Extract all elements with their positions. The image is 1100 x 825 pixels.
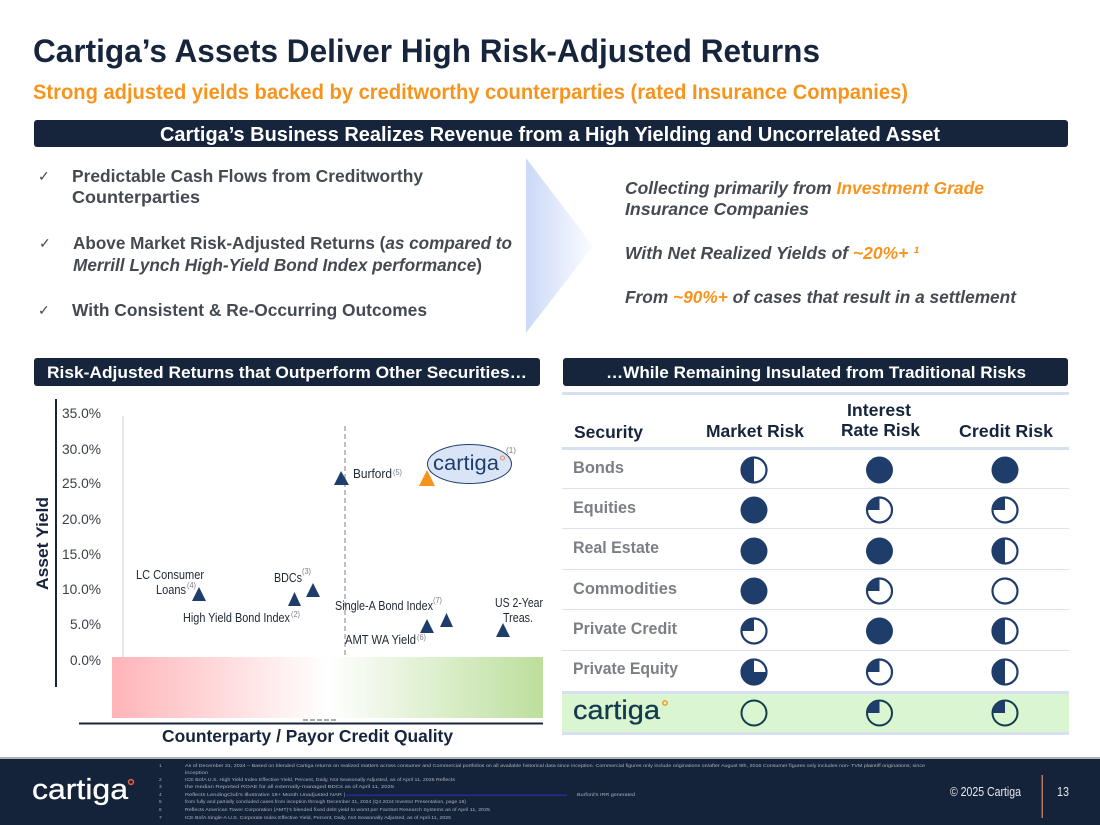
title: Cartiga’s Assets Deliver High Risk-Adjusted Returns: [33, 33, 820, 69]
data point: High Yield Bond Index: (2): [291, 610, 300, 619]
bullet: above market returns: Merrill Lynch High-Yield Bond Index performance): [73, 255, 482, 275]
data point: Burford: [334, 466, 402, 485]
panel: collection callouts: Collecting primarily from Investment Grade: [625, 178, 984, 198]
credit quality gradient: [112, 657, 543, 718]
footnotes: the median Reported ROAE for all externally-managed BDCs as of April 11, 2025: [185, 784, 394, 790]
bullet: above market returns: [39, 233, 512, 275]
data point: AMT WA Yield: [345, 619, 434, 647]
bullet: predictable cash flows: ✓: [38, 168, 50, 184]
panel: bullet list: [38, 166, 512, 320]
bullet: above market returns: ✓: [39, 235, 51, 251]
y axis ticks: 10.0%: [62, 581, 101, 597]
data point: AMT WA Yield: (6): [417, 633, 426, 642]
row: Commodities: Commodities: [573, 580, 677, 598]
x axis title: Counterparty / Payor Credit Quality: [162, 726, 453, 746]
table: risk matrix: [562, 392, 1069, 735]
footnotes: 4: [159, 792, 162, 798]
data point: US 2-Year Treas.: Treas.: [503, 610, 533, 625]
data point: LC Consumer Loans: (4): [187, 581, 196, 590]
data point: BDCs: (3): [302, 567, 311, 576]
arrow: [526, 158, 593, 333]
data point: Cartiga: [419, 444, 516, 486]
footnotes: inception: [185, 770, 208, 776]
data point: Burford: (5): [393, 468, 402, 477]
panel: collection callouts: Insurance Companies: [625, 199, 809, 219]
data point: High Yield Bond Index: High Yield Bond Index: [183, 610, 290, 625]
panel: collection callouts: With Net Realized Yields of ~20%+ ¹: [625, 243, 919, 263]
footnotes: 1: [159, 763, 162, 769]
row: Private Equity: Private Equity: [573, 660, 679, 678]
data point: US 2-Year Treas.: US 2-Year: [495, 595, 544, 610]
footer logo: cartiga: [32, 774, 129, 806]
row: Private Credit: Private Credit: [573, 620, 677, 638]
data point: Cartiga: (1): [506, 446, 516, 455]
y axis ticks: 25.0%: [62, 475, 101, 491]
row: Private Equity: [573, 660, 1018, 684]
header bar: revenue: Cartiga’s Business Realizes Revenue from a High Yielding and Uncorrelated Asset: [160, 124, 940, 146]
row: Cartiga: [573, 695, 1018, 726]
bullet: consistent outcomes: With Consistent & Re-Occurring Outcomes: [72, 300, 427, 320]
panel: collection callouts: [625, 178, 1017, 307]
data point: Single-A Bond Index: (7): [433, 596, 442, 605]
panel: collection callouts: From ~90%+ of cases that result in a settlement: [625, 287, 1017, 307]
table headers: Market Risk: [706, 421, 804, 441]
footnotes: 2: [159, 777, 162, 783]
y axis ticks: 35.0%: [62, 405, 101, 421]
data point: LC Consumer Loans: Loans: [156, 582, 186, 597]
footnotes: 7: [159, 815, 162, 821]
footnotes: As of December 31, 2024 – Based on blended Cartiga returns on realized matters across consumer and Commercial portfolios on all available historical data since inception. Commercial figures only include originations on/after August 8th, 2016 Consumer figures only includes non- TVM plaintiff originations; since: [185, 763, 925, 769]
row: Private Credit: [573, 618, 1018, 644]
bullet: predictable cash flows: [38, 166, 423, 207]
header bar: insulated from risks: …While Remaining Insulated from Traditional Risks: [606, 363, 1026, 382]
table headers: Security: [574, 422, 643, 442]
subtitle: Strong adjusted yields backed by creditworthy counterparties (rated Insurance Companies): [33, 81, 908, 104]
footnotes: [159, 763, 925, 821]
bullet: consistent outcomes: ✓: [38, 302, 50, 318]
data point: BDCs: BDCs: [274, 570, 302, 585]
data point: High Yield Bond Index: [183, 592, 301, 625]
data point: US 2-Year Treas.: [495, 595, 544, 637]
table headers: Credit Risk: [959, 421, 1053, 441]
row: Bonds: Bonds: [573, 459, 624, 477]
header bar: insulated from risks: [563, 358, 1068, 386]
page number: 13: [1057, 784, 1069, 799]
table headers: [574, 400, 1053, 442]
table headers: Interest: [847, 400, 911, 420]
data point: Cartiga: cartiga: [433, 452, 499, 475]
header bar: revenue: [34, 120, 1068, 147]
y axis ticks: 15.0%: [62, 546, 101, 562]
row: Equities: Equities: [573, 499, 636, 517]
copyright: © 2025 Cartiga: [950, 784, 1022, 799]
row: Bonds: [573, 456, 1018, 484]
data point: LC Consumer Loans: LC Consumer: [136, 567, 205, 582]
y axis title: Asset Yield: [33, 497, 52, 590]
footnotes: 5: [159, 799, 162, 805]
y axis ticks: 30.0%: [62, 441, 101, 457]
row: Real Estate: [573, 538, 1018, 564]
y axis ticks: 5.0%: [70, 616, 101, 632]
data point: Single-A Bond Index: [335, 596, 453, 627]
data point: LC Consumer Loans: [136, 567, 206, 601]
data point: BDCs: [274, 567, 320, 597]
footnotes: Burford’s IRR generated: [577, 792, 635, 798]
footnotes: Reflects LendingClub’s Illustrative 18+ Month Unadjusted NAR |: [185, 792, 345, 798]
y axis ticks: [62, 405, 101, 668]
table headers: Rate Risk: [841, 420, 920, 440]
footnotes: from fully and partially concluded cases from inception through December 31, 2024 (Q4 2024 Investor Presentation, page 18): [185, 799, 466, 805]
bullet: predictable cash flows: Counterparties: [72, 187, 200, 207]
bullet: predictable cash flows: Predictable Cash Flows from Creditworthy: [72, 166, 423, 186]
footnotes: ICE BofA U.S. High Yield Index Effective Yield, Percent, Daily, Not Seasonally Adjusted, as of April 11, 2025 Reflects: [185, 777, 456, 783]
footnotes: Reflects American Tower Corporation (AMT)’s blended fixed debt yield to worst per FactSet Research Systems as of April 11, 2025: [185, 807, 490, 813]
data point: Burford: Burford: [353, 466, 392, 481]
data point: AMT WA Yield: AMT WA Yield: [345, 632, 416, 647]
y axis ticks: 20.0%: [62, 511, 101, 527]
footnotes: ICE BofA Single-A U.S. Corporate Index Effective Yield, Percent, Daily, Not Seasonally Adjusted, as of April 11, 2025: [185, 815, 451, 821]
footnotes: 6: [159, 807, 162, 813]
row: Real Estate: Real Estate: [573, 539, 659, 557]
header bar: risk-adjusted returns: [34, 358, 540, 386]
data point: Single-A Bond Index: Single-A Bond Index: [335, 598, 433, 613]
row: Equities: [573, 496, 1018, 524]
header bar: risk-adjusted returns: Risk-Adjusted Returns that Outperform Other Securities…: [47, 363, 527, 382]
footnotes: 3: [159, 784, 162, 790]
footer: [0, 757, 1100, 825]
row: Cartiga: cartiga: [573, 695, 661, 725]
y axis ticks: 0.0%: [70, 652, 101, 668]
bullet: above market returns: Above Market Risk-Adjusted Returns (as compared to: [73, 233, 512, 253]
row: Commodities: [573, 578, 1018, 604]
chart: asset yield vs credit quality: [33, 399, 544, 746]
